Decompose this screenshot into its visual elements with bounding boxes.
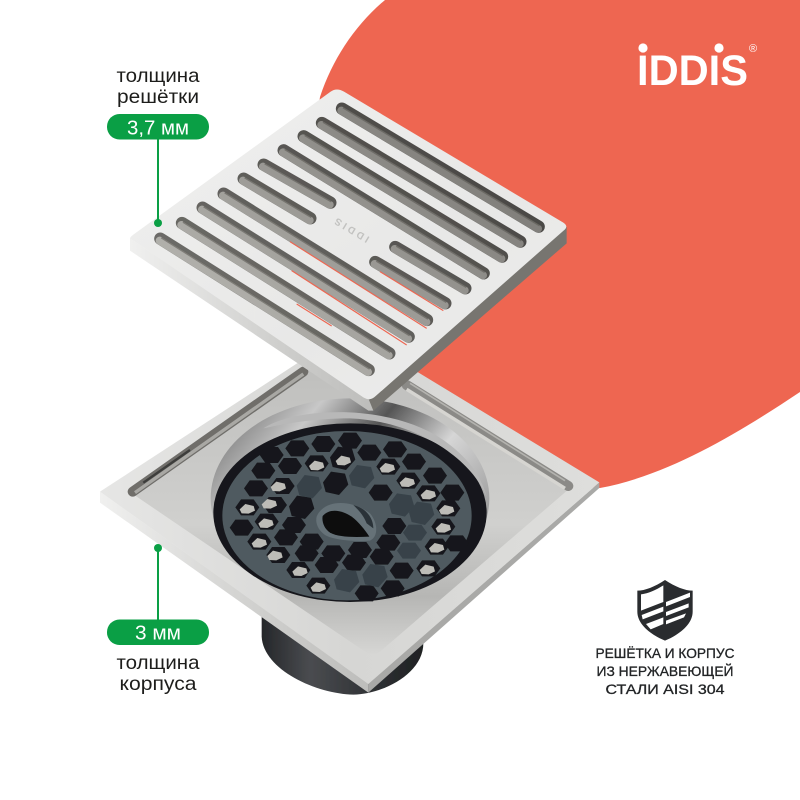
inner recessed plate [129,367,572,654]
body right side face [368,482,599,693]
green pointer line and dot [154,135,162,227]
body left side face [100,492,368,693]
material caption [596,646,735,697]
material caption: ИЗ НЕРЖАВЕЮЩЕЙ [596,664,734,679]
body top frame [100,330,599,684]
slots inner metal [160,111,538,372]
teal-tinted holes [297,465,434,592]
label: body thickness [116,652,200,695]
slots base shadow [160,109,539,370]
pill: 3 mm: 3 мм [135,622,181,644]
label: grate thickness: толщина [116,65,200,87]
left drainage slot [133,372,303,493]
metal highlight inside bowl [263,412,487,497]
dark bowl interior [213,423,487,602]
bottom callout: body thickness [107,544,209,695]
top callout: grate thickness [107,65,209,227]
pill: 3,7 mm: 3,7 мм [127,118,189,140]
grate right side face [368,227,567,411]
metal glints through holes [240,456,454,592]
green pointer line and dot [154,544,162,622]
label: grate thickness: решётки [117,86,199,108]
icon: steel shield [637,580,693,641]
grey strainer with honeycomb holes [222,431,472,601]
grate top face [130,89,566,399]
stainless bowl rim [211,398,489,598]
strainer disc [222,431,472,600]
material caption: РЕШЁТКА И КОРПУС [596,646,735,661]
dark honeycomb holes [230,433,469,601]
drain body assembly [100,330,599,695]
pill: 3 mm [107,620,209,645]
coral showing through slots [290,242,443,345]
label: grate thickness [116,65,200,108]
grate left side face [130,238,373,411]
label: body thickness: толщина [116,652,200,674]
central eye-shaped opening [316,503,376,541]
pill: 3,7 mm [107,114,209,140]
stainless slotted grate [130,89,567,411]
label: body thickness: корпуса [120,673,197,695]
material caption: СТАЛИ AISI 304 [606,682,725,697]
background coral shape [296,0,800,488]
slots dark centre streak [161,108,540,369]
right drainage slot [407,383,568,488]
black outlet pipe [262,617,423,695]
brand logo: IDDIS: ® [749,43,757,55]
brand logo: IDDIS: IDDIS [637,47,748,95]
engraved logo on grate: IDDIS [333,215,372,244]
